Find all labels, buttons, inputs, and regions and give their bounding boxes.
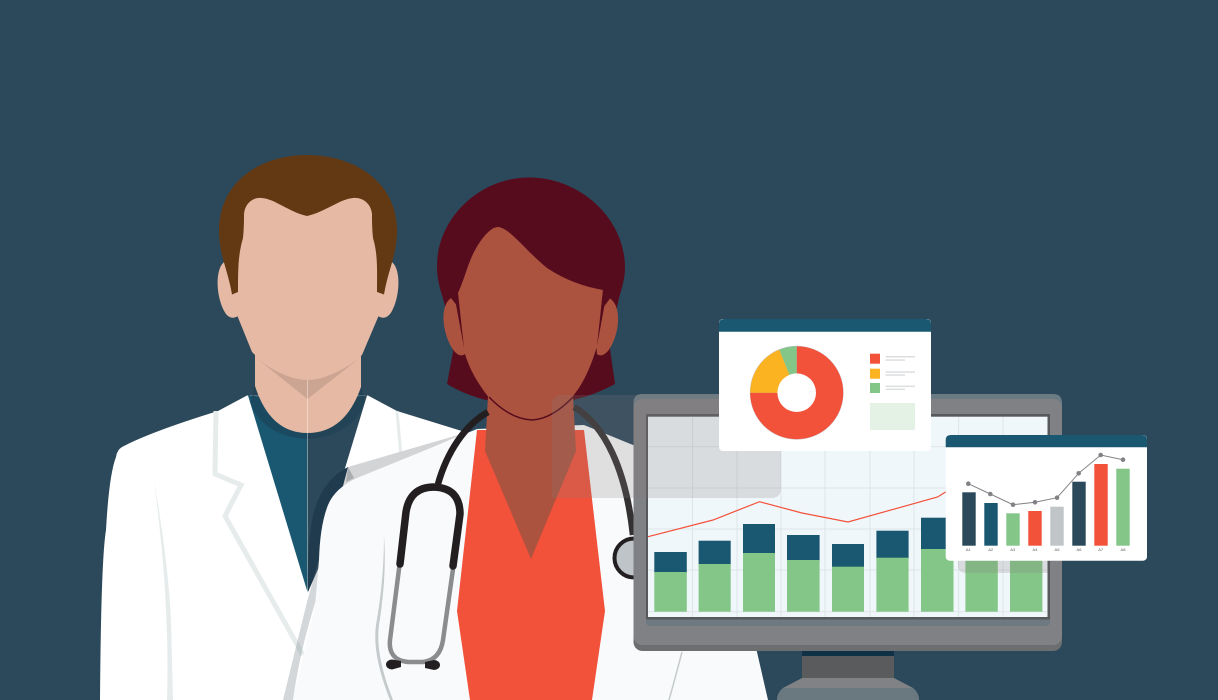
bar and line chart card: [946, 435, 1147, 561]
card axis labels: A7: [1098, 547, 1104, 552]
pie card note box: [870, 403, 915, 430]
screen red trend line: [648, 488, 952, 537]
male doctor shirt: [248, 385, 367, 592]
card axis labels: A6: [1077, 547, 1082, 552]
card axis labels: A8: [1121, 547, 1126, 552]
monitor: [634, 394, 1062, 700]
male doctor coat: [100, 396, 480, 700]
monitor frame: [634, 394, 1062, 651]
male doctor hair: [219, 155, 397, 294]
card axis labels: A2: [988, 547, 994, 552]
male doctor neck: [255, 345, 361, 433]
card axis labels: A4: [1033, 547, 1038, 552]
screen grid: [648, 417, 1048, 617]
male doctor: [100, 155, 480, 700]
coat fold right of female doctor: [669, 652, 682, 700]
female doctor ears: [443, 298, 618, 355]
female doctor coat fold: [375, 536, 393, 700]
female doctor neck: [485, 396, 576, 559]
monitor stand: [777, 650, 919, 700]
card axis labels: A5: [1055, 547, 1060, 552]
card line series: [966, 453, 1125, 507]
teal bar segments: [654, 518, 954, 573]
female doctor hair strands by ears: [455, 290, 606, 348]
card axis labels: [966, 547, 1126, 552]
bar card body: [946, 435, 1147, 561]
stethoscope right tube: [574, 407, 633, 535]
male doctor face: [237, 190, 379, 380]
stethoscope: [386, 407, 654, 670]
male doctor neck shadow: [255, 357, 361, 399]
stethoscope chest piece: [614, 538, 654, 578]
male doctor centre seam: [306, 380, 308, 630]
bar card header: [946, 435, 1147, 447]
green bar segments: [654, 549, 1042, 612]
male doctor coat fold: [154, 481, 173, 700]
shadow of pie card: [552, 395, 781, 498]
pie card body: [719, 319, 931, 451]
card axis labels: A3: [1010, 547, 1016, 552]
card bars: [962, 464, 1130, 546]
female doctor scrubs: [457, 430, 605, 700]
shoulder shadow on male coat: [283, 433, 465, 700]
stethoscope left tube: [438, 412, 488, 484]
shadow of bar card: [958, 500, 1048, 573]
male doctor ears: [218, 262, 398, 318]
monitor screen: [648, 417, 1048, 617]
monitor screen bezel: [646, 414, 1050, 626]
pie chart card: [719, 319, 931, 451]
female doctor hair: [437, 177, 625, 400]
female doctor: [283, 177, 768, 700]
female doctor face: [458, 227, 603, 418]
card axis labels: A1: [966, 547, 972, 552]
screen stacked bar chart: [654, 518, 1042, 612]
stethoscope binaurals: [400, 487, 460, 566]
stethoscope ear tips: [386, 660, 440, 670]
female doctor chin line: [489, 397, 573, 420]
donut chart: [750, 346, 844, 440]
pie card header: [719, 319, 931, 332]
female doctor coat: [293, 425, 768, 700]
donut legend: [870, 354, 915, 393]
stethoscope lower tubing: [390, 565, 453, 662]
male doctor lapel left: [215, 411, 401, 655]
